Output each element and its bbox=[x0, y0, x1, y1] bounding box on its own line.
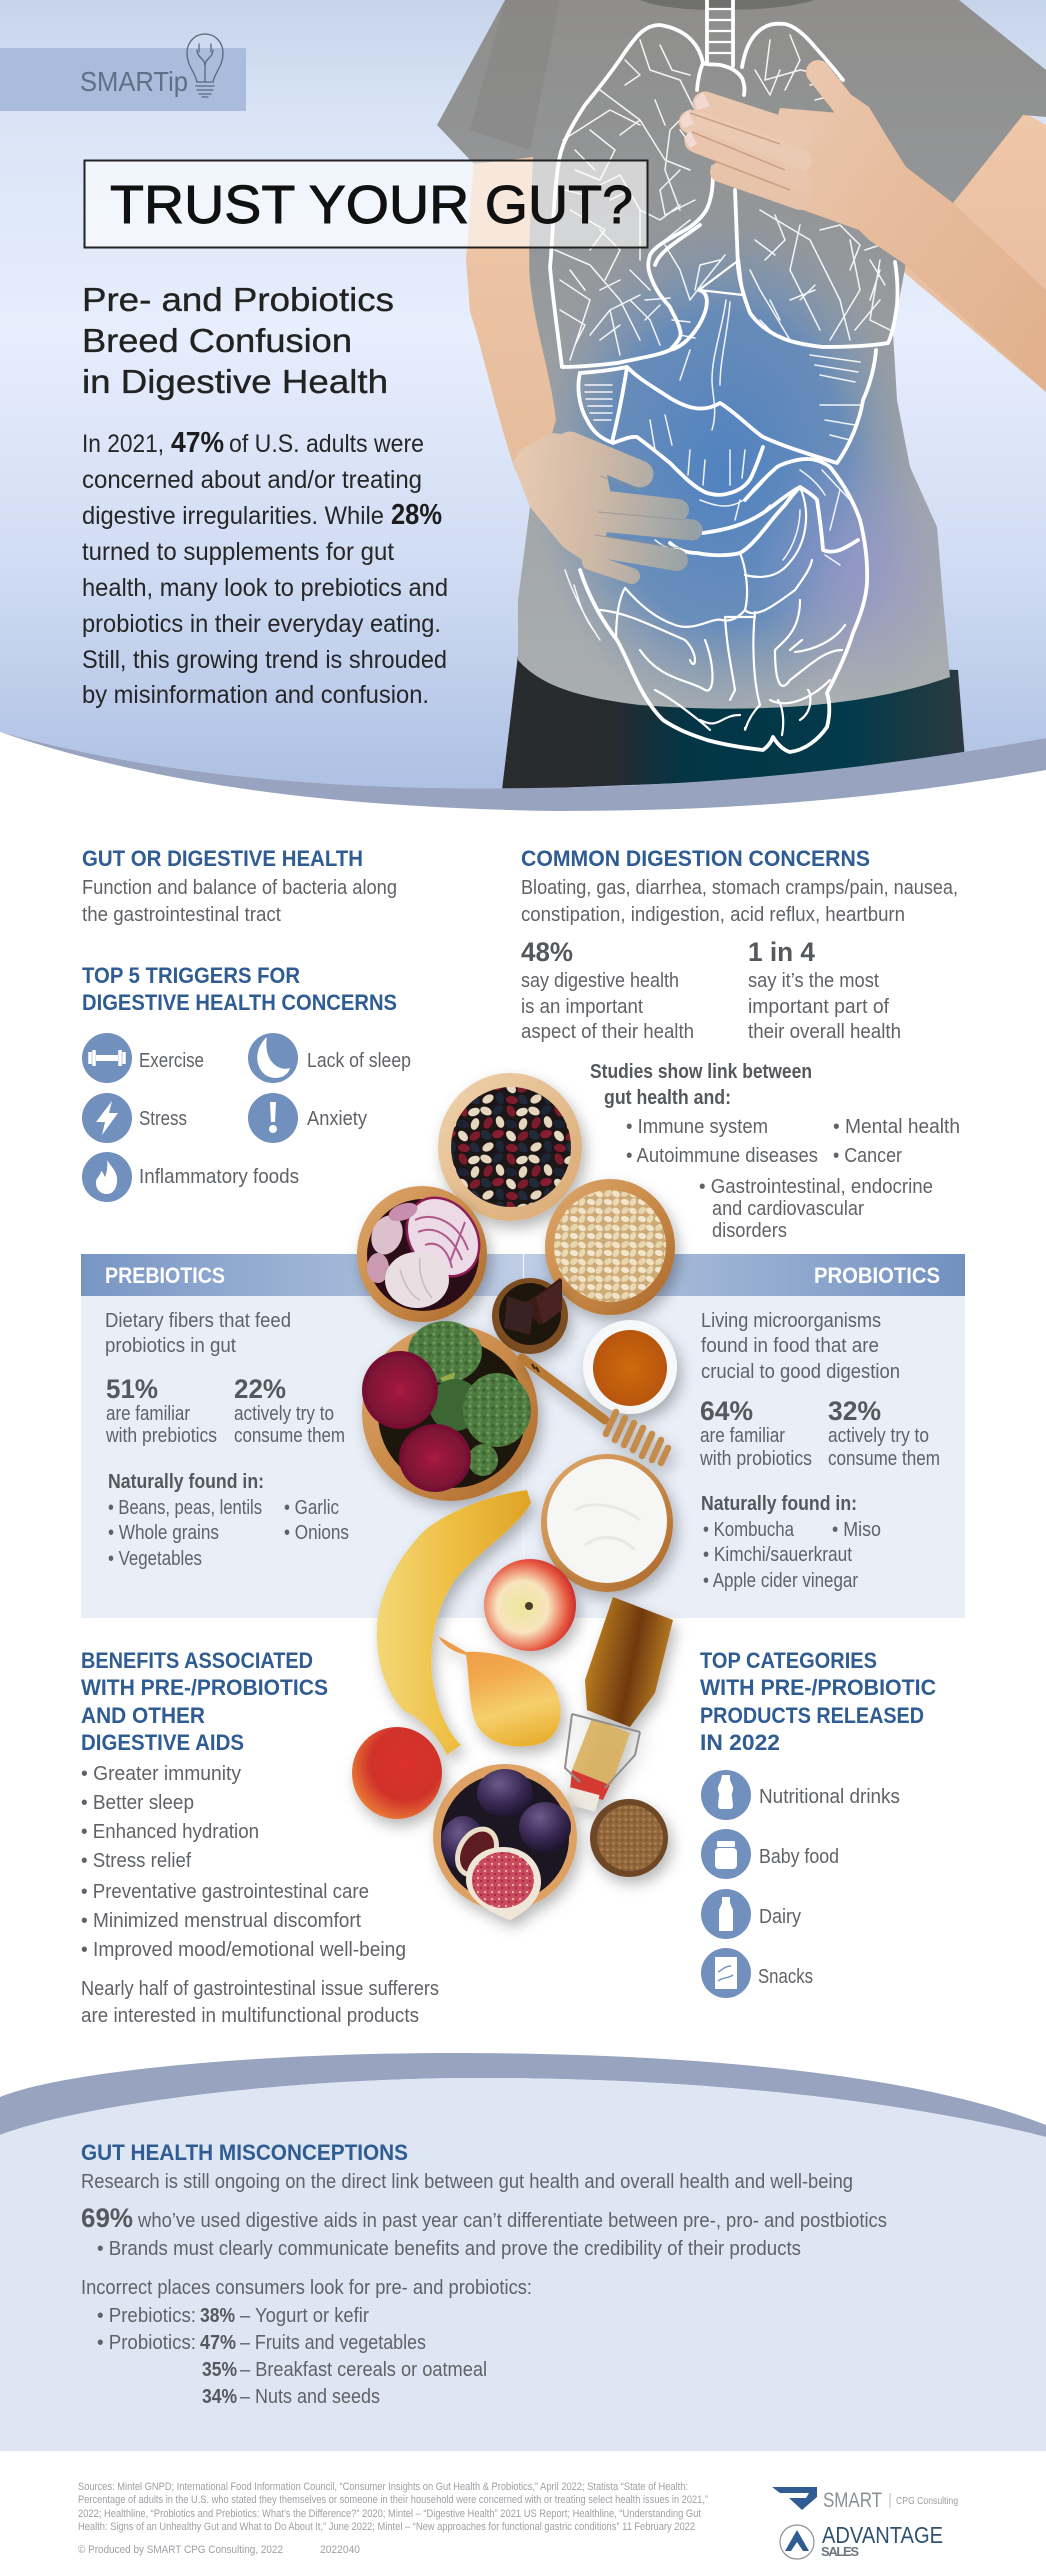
right hand on chest bbox=[680, 72, 1046, 392]
baby food label: Baby food bbox=[759, 1846, 839, 1868]
hero intro paragraph: of U.S. adults were bbox=[229, 430, 424, 458]
panel: top 5 triggers bbox=[82, 963, 411, 1202]
stat: 1 in 4: say it’s the most bbox=[748, 970, 879, 992]
panel: studies show link: Studies show link between bbox=[590, 1061, 812, 1083]
logo: Advantage Sales: SALES bbox=[821, 2544, 859, 2559]
panel: prebiotics: probiotics in gut bbox=[105, 1335, 236, 1357]
grey t-shirt bbox=[437, 0, 1046, 709]
peach bbox=[352, 1727, 442, 1819]
logo: Advantage Sales bbox=[780, 2522, 943, 2559]
icon: snack bag bbox=[701, 1948, 751, 1998]
hero intro paragraph: In 2021, bbox=[82, 430, 164, 458]
panel: prebiotics and probiotics background bbox=[81, 1254, 965, 1618]
crescent band below hero bbox=[0, 732, 1046, 811]
footer sources: 2022040 bbox=[320, 2544, 360, 2556]
snacks label: Snacks bbox=[758, 1966, 813, 1988]
hero intro paragraph: 28% bbox=[391, 499, 442, 531]
panel: top categories: PRODUCTS RELEASED bbox=[700, 1703, 924, 1728]
footer sources: Health: Signs of an Unhealthy Gut and What to Do About It,” June 2022; Mintel – “New approaches for functional gastric conditions” 11 February 2022 bbox=[78, 2521, 695, 2533]
naturally found in list: • Miso bbox=[832, 1519, 881, 1541]
bowl: spice bbox=[590, 1799, 668, 1877]
badge label: SMARTip bbox=[80, 66, 188, 97]
naturally found in list: Naturally found in: bbox=[701, 1493, 857, 1515]
incorrect places list bbox=[81, 2277, 532, 2408]
hero intro paragraph: by misinformation and confusion. bbox=[82, 681, 429, 709]
naturally found in list bbox=[701, 1493, 881, 1592]
subtitle: Pre- and Probiotics bbox=[82, 281, 394, 318]
logo: SMART CPG Consulting: SMART bbox=[823, 2489, 882, 2512]
SMARTip badge bbox=[0, 34, 246, 111]
panel: probiotics: found in food that are bbox=[701, 1335, 879, 1357]
inflammatory foods label: Inflammatory foods bbox=[139, 1166, 299, 1188]
stat: 22% consume: consume them bbox=[234, 1425, 345, 1447]
panel: gut health misconceptions: Research is still ongoing on the direct link between gut health and overall health and well-being bbox=[81, 2171, 853, 2193]
subtitle bbox=[82, 281, 394, 400]
panel: prebiotics: Dietary fibers that feed bbox=[105, 1310, 291, 1332]
benefits list: • Preventative gastrointestinal care bbox=[81, 1881, 369, 1903]
stat: 51% familiar: are familiar bbox=[106, 1403, 190, 1425]
exercise label: Exercise bbox=[139, 1050, 204, 1072]
incorrect places list: – Breakfast cereals or oatmeal bbox=[240, 2359, 487, 2381]
lungs outline bbox=[550, 0, 898, 367]
incorrect places list: • Prebiotics: bbox=[97, 2305, 196, 2327]
icon: drink bottle bbox=[701, 1770, 751, 1820]
bowl: dark chocolate bbox=[492, 1278, 568, 1354]
right upper arm behind shirt bbox=[893, 112, 1046, 392]
icon: milk bottle bbox=[701, 1889, 751, 1939]
hero intro paragraph bbox=[82, 427, 448, 709]
stat: 69% bbox=[81, 2203, 887, 2233]
panel: benefits: BENEFITS ASSOCIATED bbox=[81, 1648, 313, 1673]
stat: 32% consume: 32% bbox=[828, 1396, 881, 1426]
hero intro paragraph: turned to supplements for gut bbox=[82, 538, 394, 566]
panel: top categories: IN 2022 bbox=[700, 1730, 780, 1755]
panel: common digestion concerns: Bloating, gas, diarrhea, stomach cramps/pain, nausea, bbox=[521, 877, 958, 899]
stat: 48%: is an important bbox=[521, 996, 643, 1018]
incorrect places list: – Yogurt or kefir bbox=[240, 2305, 369, 2327]
incorrect places list: 35% bbox=[202, 2359, 237, 2381]
naturally found in list: • Onions bbox=[284, 1522, 349, 1544]
stat: 22% consume: 22% bbox=[234, 1374, 286, 1404]
stat: 64% familiar: 64% bbox=[700, 1396, 753, 1426]
naturally found in list: • Kombucha bbox=[703, 1519, 795, 1541]
footer sources: Sources: Mintel GNPD; International Food Information Council, “Consumer Insights on Gut Health & Probiotics,” April 2022; Statista “State of Health: bbox=[78, 2481, 688, 2493]
panel: gut health misconceptions bbox=[81, 2140, 887, 2408]
panel: common digestion concerns: COMMON DIGESTION CONCERNS bbox=[521, 846, 870, 871]
liver and stomach outline bbox=[578, 290, 876, 495]
stat: 64% familiar: with probiotics bbox=[699, 1448, 812, 1470]
incorrect places list: – Fruits and vegetables bbox=[240, 2332, 426, 2354]
panel: studies show link: • Immune system bbox=[626, 1116, 768, 1138]
panel: benefits: DIGESTIVE AIDS bbox=[81, 1730, 244, 1755]
icon: lightning bolt bbox=[82, 1093, 132, 1143]
panel: top categories: TOP CATEGORIES bbox=[700, 1648, 877, 1673]
stat: 51% familiar: with prebiotics bbox=[105, 1425, 217, 1447]
hero intro paragraph: health, many look to prebiotics and bbox=[82, 574, 448, 602]
panel: studies show link: • Gastrointestinal, endocrine bbox=[699, 1176, 933, 1198]
honey dipper bbox=[522, 1358, 668, 1463]
stat: 69%: 69% bbox=[81, 2203, 133, 2233]
bowl: yogurt bbox=[541, 1454, 673, 1592]
panel: benefits bbox=[81, 1648, 439, 2027]
icon: exclamation mark bbox=[248, 1093, 298, 1143]
logo: SMART CPG Consulting bbox=[772, 2487, 958, 2512]
subtitle: in Digestive Health bbox=[82, 363, 388, 400]
incorrect places list: • Probiotics: bbox=[97, 2332, 196, 2354]
incorrect places list: 38% bbox=[200, 2305, 235, 2327]
bowl: oats bbox=[545, 1179, 675, 1315]
panel: probiotics bbox=[699, 1263, 940, 1592]
illustration: torso with digestive organs bbox=[437, 0, 1046, 790]
naturally found in list: Naturally found in: bbox=[108, 1471, 264, 1493]
panel: studies show link: • Mental health bbox=[833, 1116, 960, 1138]
panel: common digestion concerns: constipation, indigestion, acid reflux, heartburn bbox=[521, 904, 905, 926]
naturally found in list: • Kimchi/sauerkraut bbox=[703, 1544, 852, 1566]
panel: probiotics: Living microorganisms bbox=[701, 1310, 881, 1332]
icon: flame bbox=[82, 1152, 132, 1202]
apple bbox=[484, 1559, 576, 1651]
bowl: beets and broccoli bbox=[362, 1321, 538, 1501]
stat: 1 in 4: their overall health bbox=[748, 1021, 901, 1043]
panel: misconceptions background bbox=[0, 2053, 1046, 2451]
stat: 69%: who’ve used digestive aids in past year can’t differentiate between pre-, pro- and postbiotics bbox=[137, 2210, 887, 2232]
title box bbox=[84, 160, 648, 248]
banana bbox=[377, 1490, 531, 1755]
stat: 51% familiar bbox=[105, 1374, 217, 1447]
hero intro paragraph: probiotics in their everyday eating. bbox=[82, 610, 441, 638]
naturally found in list: • Beans, peas, lentils bbox=[108, 1497, 262, 1519]
title text: TRUST YOUR GUT? bbox=[110, 175, 633, 235]
logo: SMART CPG Consulting: CPG Consulting bbox=[896, 2496, 958, 2507]
light panel bbox=[0, 2078, 1046, 2451]
stat: 48%: 48% bbox=[521, 937, 573, 967]
honey dish bbox=[583, 1320, 677, 1414]
benefits list bbox=[81, 1763, 406, 1961]
hero intro paragraph: Still, this growing trend is shrouded bbox=[82, 646, 447, 674]
incorrect places list: 34% bbox=[202, 2386, 237, 2408]
incorrect places list: Incorrect places consumers look for pre- and probiotics: bbox=[81, 2277, 532, 2299]
hero panel bbox=[0, 0, 1046, 811]
panel: benefits: WITH PRE-/PROBIOTICS bbox=[81, 1675, 328, 1700]
intestines outline bbox=[565, 459, 867, 752]
panel: prebiotics bbox=[105, 1263, 349, 1570]
bowl: plums and figs bbox=[433, 1764, 577, 1920]
multifunctional note: Nearly half of gastrointestinal issue sufferers bbox=[81, 1978, 439, 2000]
footer sources bbox=[78, 2481, 708, 2556]
left arm bbox=[466, 155, 570, 470]
incorrect places list: 47% bbox=[200, 2332, 236, 2354]
naturally found in list: • Vegetables bbox=[108, 1548, 202, 1570]
benefits list: • Minimized menstrual discomfort bbox=[81, 1910, 361, 1932]
stat: 64% familiar bbox=[699, 1396, 812, 1470]
panel: prebiotics: PREBIOTICS bbox=[105, 1263, 225, 1288]
panel: benefits: AND OTHER bbox=[81, 1703, 205, 1728]
naturally found in list: • Whole grains bbox=[108, 1522, 219, 1544]
panel: top categories bbox=[700, 1648, 936, 1998]
stat: 48% bbox=[521, 937, 694, 1043]
stat: 48%: say digestive health bbox=[521, 970, 679, 992]
icon: moon bbox=[248, 1033, 298, 1083]
icon: dumbbell bbox=[82, 1033, 132, 1083]
stat: 22% consume bbox=[234, 1374, 345, 1447]
black pants bbox=[502, 655, 966, 790]
stress label: Stress bbox=[139, 1108, 187, 1130]
stat: 64% familiar: are familiar bbox=[700, 1425, 785, 1447]
footer sources: © Produced by SMART CPG Consulting, 2022 bbox=[78, 2544, 283, 2556]
panel: studies show link: and cardiovascular bbox=[712, 1198, 864, 1220]
stat: 51% familiar: 51% bbox=[106, 1374, 158, 1404]
hero intro paragraph: concerned about and/or treating bbox=[82, 466, 422, 494]
bowl: beans bbox=[438, 1073, 582, 1221]
stat: 48%: aspect of their health bbox=[521, 1021, 694, 1043]
lack of sleep label: Lack of sleep bbox=[307, 1050, 411, 1072]
benefits list: • Greater immunity bbox=[81, 1763, 241, 1785]
bottle of apple cider vinegar bbox=[565, 1597, 673, 1812]
incorrect places list: – Nuts and seeds bbox=[240, 2386, 380, 2408]
food illustration column bbox=[352, 1073, 677, 1920]
logo: Advantage Sales: ADVANTAGE bbox=[822, 2522, 943, 2548]
benefits list: • Enhanced hydration bbox=[81, 1821, 259, 1843]
stat: 32% consume: consume them bbox=[828, 1448, 940, 1470]
anxiety label: Anxiety bbox=[307, 1108, 367, 1130]
panel: probiotics: PROBIOTICS bbox=[814, 1263, 940, 1288]
multifunctional note: are interested in multifunctional products bbox=[81, 2005, 419, 2027]
hero intro paragraph: 47% bbox=[171, 427, 224, 459]
nutritional drinks label: Nutritional drinks bbox=[759, 1786, 900, 1808]
panel: common digestion concerns bbox=[521, 846, 958, 1043]
stat: 1 in 4: important part of bbox=[748, 996, 889, 1018]
pear bbox=[438, 1636, 561, 1746]
panel: top 5 triggers: DIGESTIVE HEALTH CONCERNS bbox=[82, 990, 397, 1015]
brands bullet: • Brands must clearly communicate benefits and prove the credibility of their products bbox=[97, 2238, 801, 2260]
panel: studies show link bbox=[590, 1061, 960, 1242]
hero gradient background bbox=[0, 0, 1046, 788]
panel: gut health misconceptions: GUT HEALTH MISCONCEPTIONS bbox=[81, 2140, 408, 2165]
panel: probiotics: crucial to good digestion bbox=[701, 1361, 900, 1383]
blue glow overlay bbox=[470, 0, 965, 725]
dairy label: Dairy bbox=[759, 1906, 801, 1928]
hero intro paragraph: digestive irregularities. While bbox=[82, 502, 384, 530]
icon: baby food jar bbox=[701, 1829, 751, 1879]
benefits list: • Better sleep bbox=[81, 1792, 194, 1814]
naturally found in list: • Garlic bbox=[284, 1497, 339, 1519]
panel: gut or digestive health definition: the gastrointestinal tract bbox=[82, 904, 281, 926]
stat: 22% consume: actively try to bbox=[234, 1403, 334, 1425]
subtitle: Breed Confusion bbox=[82, 322, 352, 359]
panel: studies show link: • Autoimmune diseases bbox=[626, 1145, 818, 1167]
footer sources: 2022; Healthline, “Probiotics and Prebiotics: What’s the Difference?” 2020; Mintel – “Digestive Health” 2021 US Report; Healthline, “Understanding Gut bbox=[78, 2508, 701, 2520]
stat: 1 in 4 bbox=[748, 937, 901, 1043]
stat: 32% consume: actively try to bbox=[828, 1425, 929, 1447]
multifunctional note bbox=[81, 1978, 439, 2027]
crescent band bbox=[0, 2053, 1046, 2137]
footer sources: Percentage of adults in the U.S. who stated they themselves or someone in their household were concerned with or treating select health issues in 2021,” bbox=[78, 2494, 708, 2506]
naturally found in list: • Apple cider vinegar bbox=[703, 1570, 858, 1592]
benefits list: • Stress relief bbox=[81, 1850, 191, 1872]
panel: gut or digestive health definition: Function and balance of bacteria along bbox=[82, 877, 397, 899]
panel: gut or digestive health definition bbox=[82, 846, 397, 926]
panel: studies show link: gut health and: bbox=[604, 1087, 731, 1109]
stat: 32% consume bbox=[828, 1396, 940, 1470]
icon: lightbulb bbox=[187, 34, 223, 97]
naturally found in list bbox=[108, 1471, 349, 1570]
badge bar bbox=[0, 48, 246, 111]
panel: studies show link: disorders bbox=[712, 1220, 787, 1242]
panel: top categories: WITH PRE-/PROBIOTIC bbox=[700, 1675, 936, 1700]
left hand on abdomen bbox=[513, 433, 692, 576]
bowl: onion and garlic bbox=[357, 1184, 494, 1322]
panel: gut or digestive health definition: GUT OR DIGESTIVE HEALTH bbox=[82, 846, 363, 871]
panel: top 5 triggers: TOP 5 TRIGGERS FOR bbox=[82, 963, 300, 988]
stat: 1 in 4: 1 in 4 bbox=[748, 937, 815, 967]
benefits list: • Improved mood/emotional well-being bbox=[81, 1939, 406, 1961]
panel: studies show link: • Cancer bbox=[833, 1145, 902, 1167]
